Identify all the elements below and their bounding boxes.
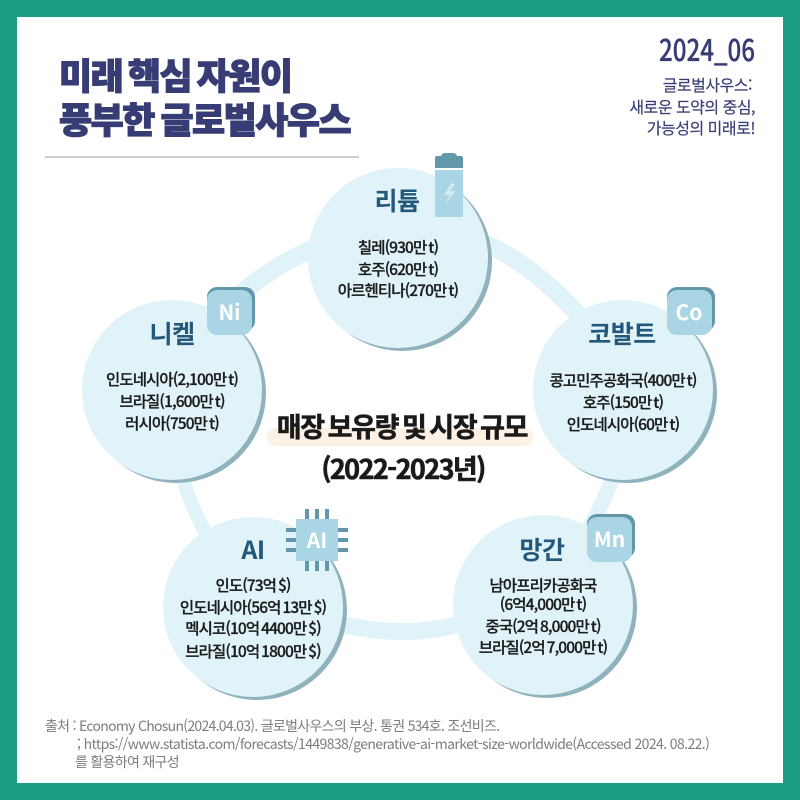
icon: battery [435, 153, 463, 217]
issue subtitle: 글로벌사우스: [663, 72, 752, 96]
centre heading: (2022-2023년) [321, 448, 485, 487]
icon: Mn badge [587, 514, 635, 562]
reserves: nickel: 인도네시아(2,100만 t) [106, 368, 238, 390]
reserves: lithium: 아르헨티나(270만 t) [338, 279, 459, 301]
icon: Mn badge: Mn [594, 524, 625, 554]
icon: Ni badge: Ni [218, 297, 241, 327]
panel: AI [163, 509, 348, 700]
icon: AI chip: AI [306, 525, 327, 555]
issue number: 2024_06 [659, 26, 755, 70]
reserves: manganese: 남아프리카공화국 [490, 574, 597, 596]
icon: AI chip [286, 509, 348, 571]
issue subtitle: 가능성의 미래로! [647, 115, 755, 139]
reserves: AI: 인도(73억 $) [215, 574, 291, 596]
title: 풍부한 글로벌사우스 [59, 92, 351, 144]
heading: lithium: 리튬 [374, 182, 420, 218]
reserves: AI: 멕시코(10억 4400만 $) [185, 617, 321, 639]
reserves: lithium [338, 236, 459, 301]
source note: 출처 : Economy Chosun(2024.04.03). 글로벌사우스의 부상. 통권 534호. 조선비즈. [45, 716, 499, 736]
heading: cobalt: 코발트 [588, 315, 656, 351]
heading: AI: AI [240, 531, 265, 567]
reserves: cobalt: 인도네시아(60만 t) [567, 413, 680, 435]
source note: ; https://www.statista.com/forecasts/1449838/generative-ai-market-size-worldwide(Accessed 2024. 08.22.) [77, 734, 709, 754]
reserves: AI: 인도네시아(56억 13만 $) [180, 596, 327, 618]
centre heading: 매장 보유량 및 시장 규모 [277, 406, 528, 445]
issue subtitle [629, 72, 755, 139]
reserves: lithium: 칠레(930만 t) [358, 236, 439, 258]
panel: cobalt [533, 287, 717, 483]
reserves: manganese: 브라질(2억 7,000만 t) [479, 636, 608, 658]
issue subtitle: 새로운 도약의 중심, [629, 94, 755, 118]
icon: Co badge: Co [676, 297, 702, 327]
reserves: manganese: (6억4,000만 t) [500, 593, 587, 615]
reserves: manganese [479, 574, 608, 658]
source note [45, 716, 709, 772]
source note: 를 활용하여 재구성 [75, 752, 179, 772]
panel: manganese [453, 514, 637, 698]
reserves: AI [180, 574, 327, 662]
icon: Co badge [667, 287, 715, 335]
reserves: cobalt: 콩고민주공화국(400만 t) [549, 369, 697, 391]
icon: Ni badge [207, 287, 255, 335]
title [59, 48, 351, 144]
panel: nickel [82, 287, 266, 483]
title: 미래 핵심 자원이 [59, 48, 292, 100]
reserves: cobalt: 호주(150만 t) [583, 391, 664, 413]
heading: nickel: 니켈 [149, 315, 195, 351]
reserves: lithium: 호주(620만 t) [358, 258, 439, 280]
reserves: nickel: 브라질(1,600만 t) [119, 390, 225, 412]
centre heading [267, 406, 533, 487]
heading: manganese: 망간 [519, 531, 565, 567]
title divider [45, 156, 359, 158]
reserves: AI: 브라질(10억 1800만 $) [185, 640, 321, 662]
panel: lithium [308, 153, 492, 351]
reserves: cobalt [549, 369, 697, 435]
reserves: manganese: 중국(2억 8,000만 t) [485, 615, 601, 637]
connecting ring [178, 238, 618, 632]
reserves: nickel [106, 368, 238, 434]
reserves: nickel: 러시아(750만 t) [125, 412, 219, 434]
